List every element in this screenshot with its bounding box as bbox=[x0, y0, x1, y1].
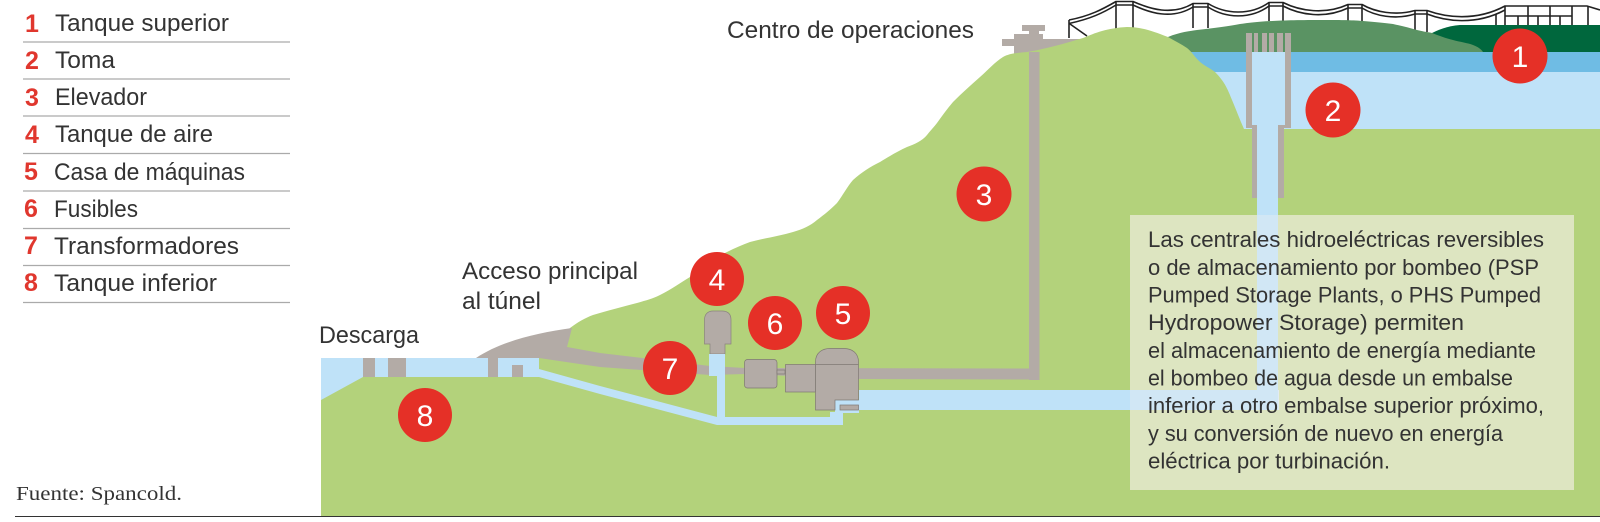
legend item 1: 1 bbox=[25, 10, 39, 38]
marker 6: 6 bbox=[767, 308, 783, 341]
legend item 4 bbox=[23, 121, 290, 154]
powerhouse outlet water bbox=[830, 400, 859, 425]
marker 3 bbox=[956, 166, 1012, 222]
marker 3: 3 bbox=[976, 179, 992, 212]
text box: y su conversión de nuevo en energía bbox=[1148, 421, 1503, 446]
marker 4 bbox=[690, 252, 744, 306]
power lines bbox=[1069, 1, 1600, 38]
operations centre bbox=[1002, 25, 1092, 60]
label: operations centre: Centro de operaciones bbox=[727, 17, 974, 44]
legend item 2: 2 bbox=[25, 47, 39, 75]
legend item 4: Tanque de aire bbox=[55, 121, 213, 148]
text box: eléctrica por turbinación. bbox=[1148, 448, 1390, 474]
text box: inferior a otro embalse superior próximo, bbox=[1148, 393, 1544, 418]
legend item 3: 3 bbox=[25, 84, 39, 112]
lift shaft bbox=[1029, 52, 1040, 380]
legend item 7: Transformadores bbox=[54, 233, 239, 260]
text box: el bombeo de agua desde un embalse bbox=[1148, 366, 1513, 390]
main penstock bbox=[859, 125, 1279, 410]
legend item 4: 4 bbox=[25, 121, 39, 149]
marker 2 bbox=[1306, 82, 1360, 138]
mid green hill bbox=[1150, 20, 1483, 60]
legend item 5 bbox=[23, 158, 290, 191]
text box: el almacenamiento de energía mediante bbox=[1148, 338, 1536, 363]
label: tunnel access: Acceso principal bbox=[462, 258, 638, 285]
legend item 6 bbox=[23, 195, 290, 228]
legend item 6: Fusibles bbox=[54, 196, 138, 223]
legend item 6: 6 bbox=[24, 195, 38, 223]
marker 1: 1 bbox=[1512, 41, 1528, 74]
upper reservoir background hills bbox=[1150, 20, 1600, 60]
air tank bbox=[704, 311, 731, 354]
legend item 5: Casa de máquinas bbox=[54, 159, 245, 186]
legend bbox=[23, 10, 290, 302]
lower reservoir water and discharge duct bbox=[321, 358, 835, 425]
marker 7: 7 bbox=[662, 353, 678, 386]
intake tower bbox=[1246, 33, 1291, 198]
legend item 7: 7 bbox=[24, 232, 38, 260]
text box: Pumped Storage Plants, o PHS Pumped bbox=[1148, 282, 1541, 308]
marker 7 bbox=[643, 341, 697, 395]
label: tunnel access bbox=[462, 258, 638, 315]
fuses bbox=[744, 360, 785, 388]
legend item 8: Tanque inferior bbox=[54, 270, 217, 297]
marker 5 bbox=[816, 286, 870, 340]
text box bbox=[1130, 215, 1574, 490]
access tunnel bbox=[476, 328, 1030, 380]
label: tunnel access: al túnel bbox=[462, 288, 541, 315]
label: discharge: Descarga bbox=[319, 322, 419, 349]
legend item 8: 8 bbox=[24, 269, 38, 297]
legend item 8 bbox=[23, 269, 290, 302]
legend item 1: Tanque superior bbox=[55, 10, 229, 37]
marker 6 bbox=[748, 296, 802, 350]
legend item 3: Elevador bbox=[55, 84, 147, 111]
air tank riser bbox=[709, 354, 725, 418]
legend item 7 bbox=[23, 232, 290, 266]
text box: Hydropower Storage) permiten bbox=[1148, 310, 1464, 335]
powerhouse bbox=[786, 348, 858, 410]
legend item 1 bbox=[23, 10, 290, 42]
marker 2: 2 bbox=[1325, 95, 1341, 128]
dark green hill bbox=[1430, 25, 1600, 52]
legend item 3 bbox=[23, 84, 290, 116]
legend item 2: Toma bbox=[55, 47, 115, 74]
source note: Fuente: Spancold. bbox=[16, 483, 182, 505]
discharge piers bbox=[363, 358, 523, 377]
text box: Las centrales hidroeléctricas reversibles bbox=[1148, 227, 1544, 252]
number markers bbox=[398, 28, 1548, 442]
mountain and ground bbox=[321, 27, 1600, 516]
marker 8: 8 bbox=[417, 400, 433, 433]
marker 4: 4 bbox=[709, 264, 725, 297]
legend item 2 bbox=[23, 47, 290, 79]
marker 5: 5 bbox=[835, 298, 851, 331]
marker 1 bbox=[1492, 28, 1548, 84]
marker 8 bbox=[398, 388, 452, 442]
legend item 5: 5 bbox=[24, 158, 38, 186]
text box: o de almacenamiento por bombeo (PSP bbox=[1148, 255, 1539, 280]
upper reservoir water bbox=[1170, 52, 1600, 130]
